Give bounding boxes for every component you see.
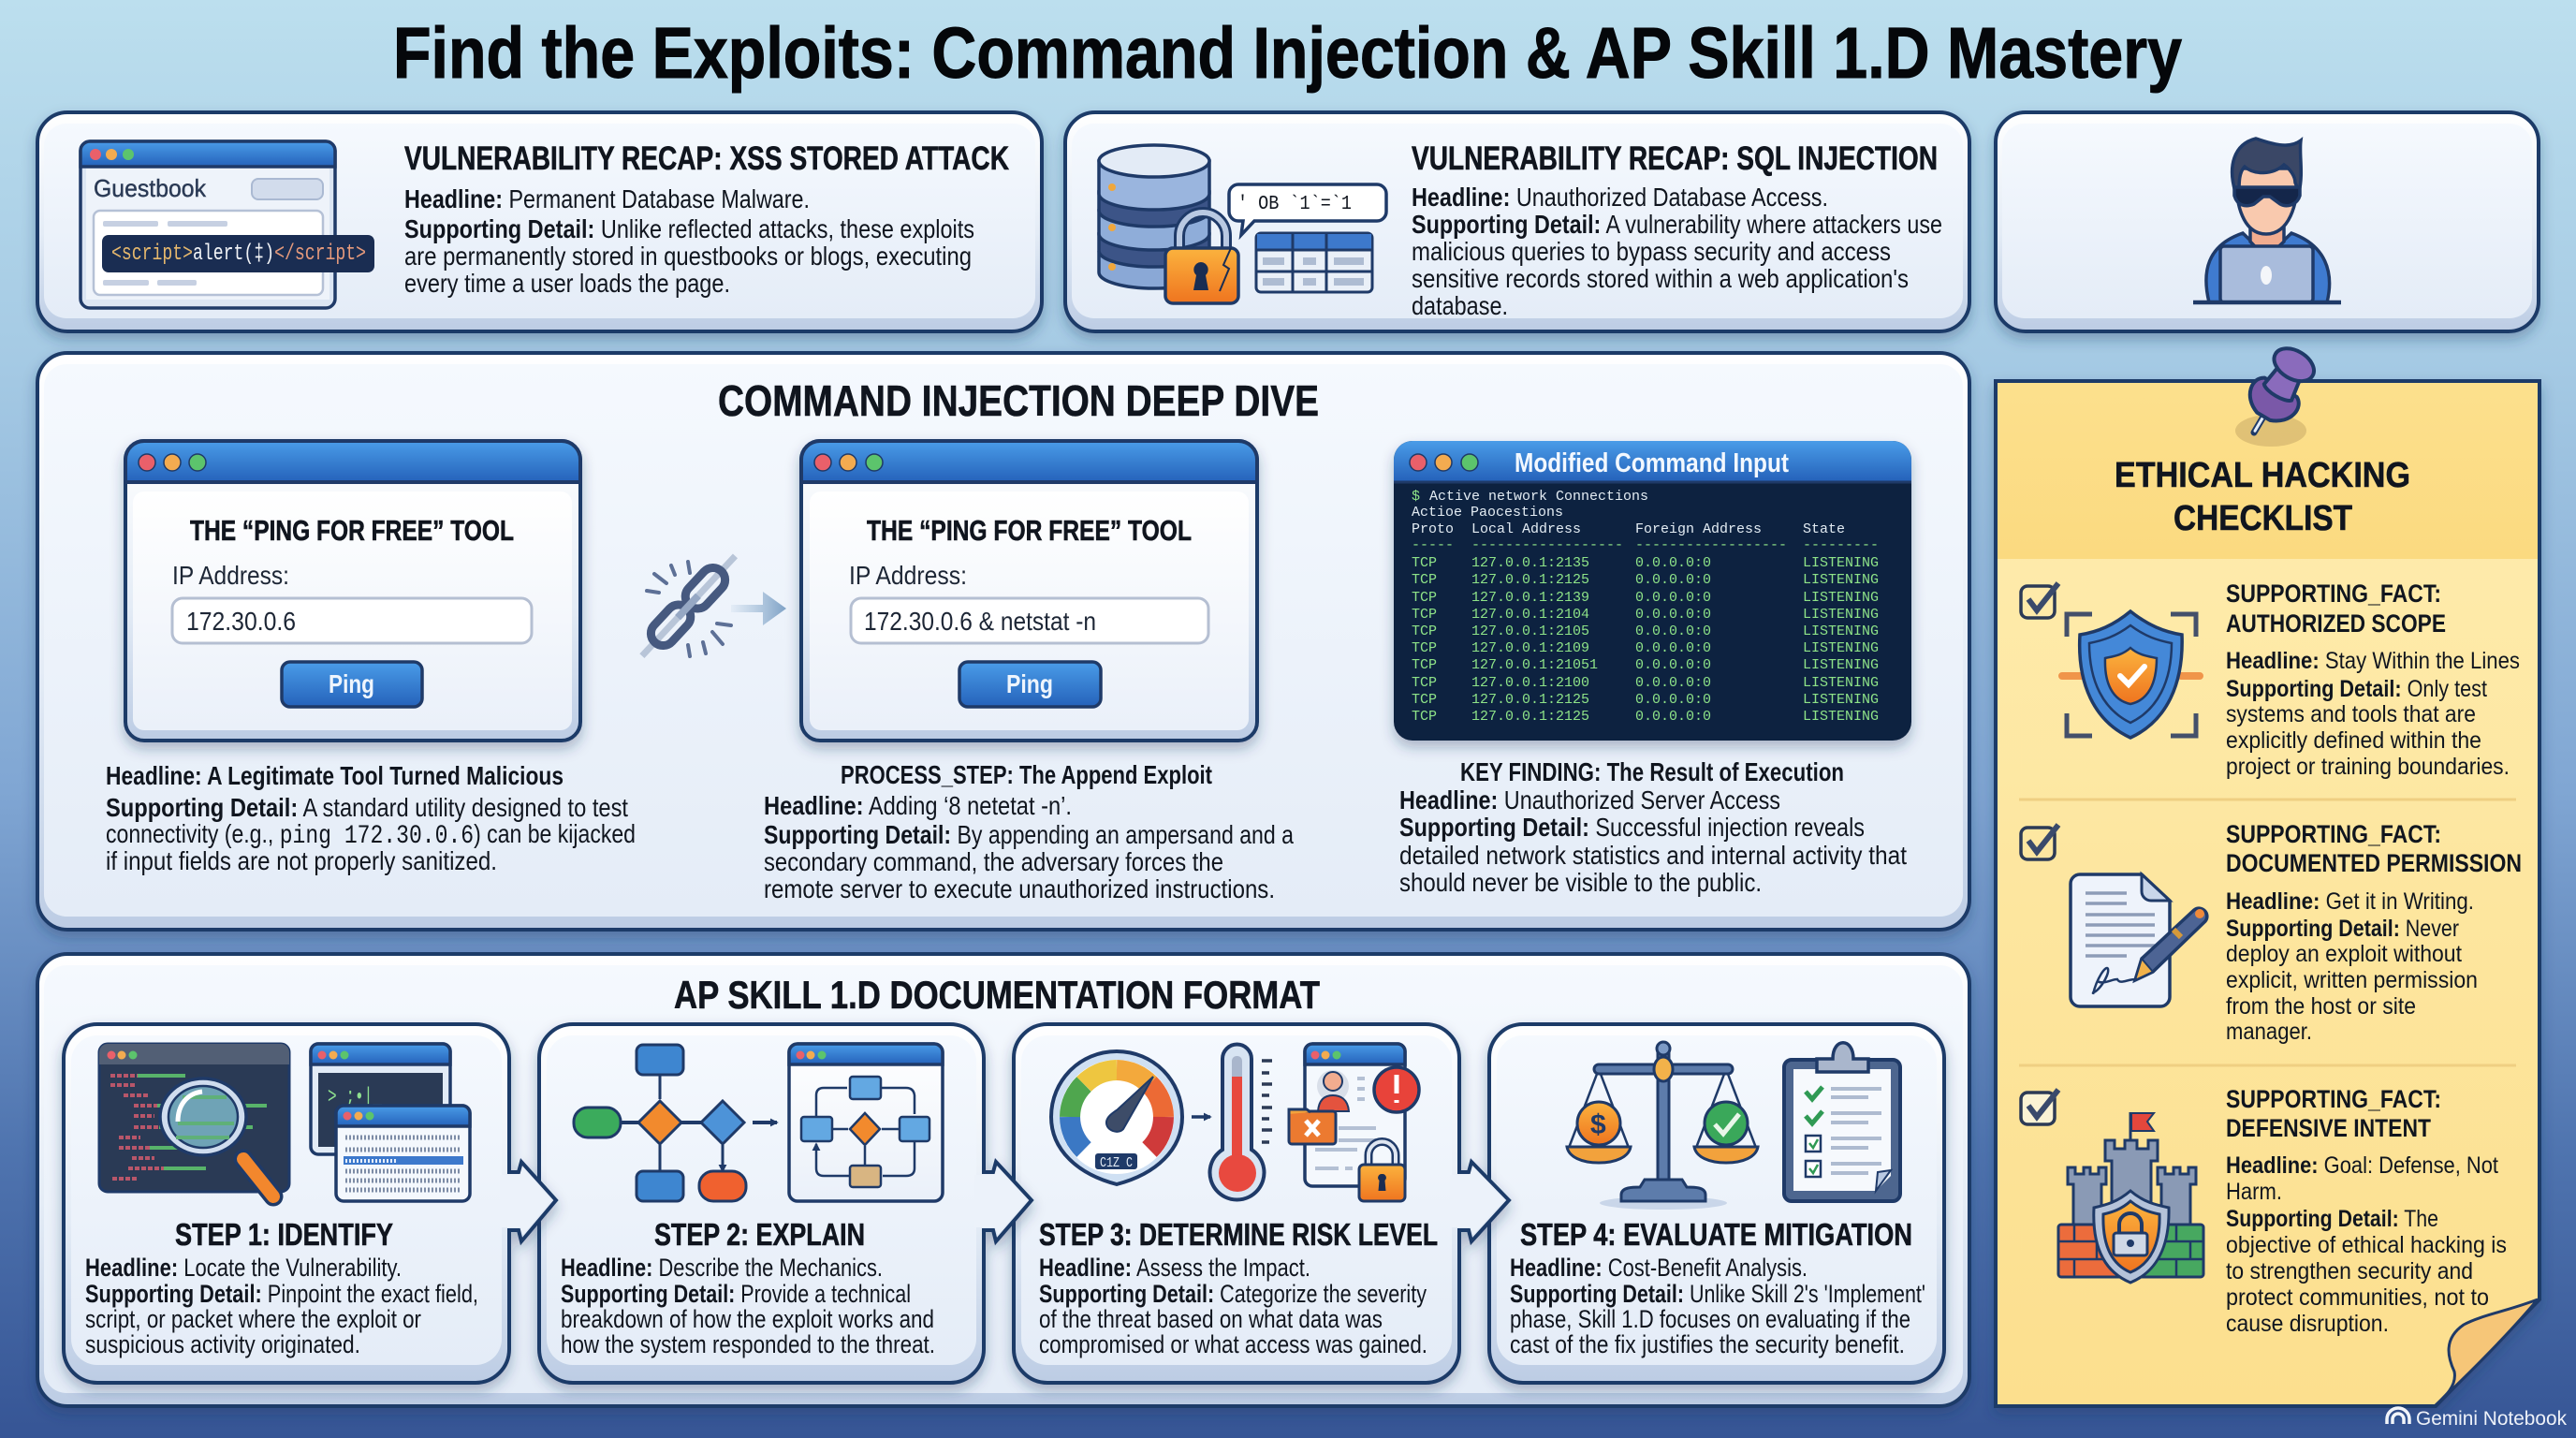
- title: Find the Exploits: Command Injection & AP Skill 1.D Mastery: [393, 13, 2182, 94]
- window: ping tool, exploited: [801, 441, 1257, 741]
- text block: key finding: [1399, 757, 1907, 897]
- text block: step 3: Headline: Assess the Impact.: [1039, 1254, 1310, 1282]
- terminal text: LISTENING: [1803, 709, 1879, 725]
- icon: corner curl: [2436, 1299, 2538, 1405]
- terminal text: LISTENING: [1803, 692, 1879, 708]
- icon: risk gauge: C1Z C: [1100, 1155, 1133, 1171]
- text block: step 4: cast of the fix justifies the security benefit.: [1510, 1330, 1905, 1358]
- icon: guestbook window: <script>alert(‡)</script>: [111, 242, 366, 267]
- terminal text: Proto: [1412, 521, 1454, 537]
- terminal text: 127.0.0.1:2125: [1471, 572, 1589, 588]
- text block: documented permission: SUPPORTING_FACT:: [2226, 820, 2441, 848]
- heading: step 3: STEP 3: DETERMINE RISK LEVEL: [1039, 1217, 1438, 1252]
- step 2: explain: [539, 1024, 1032, 1383]
- text block: legitimate tool: if input fields are not properly sanitized.: [106, 846, 497, 875]
- window: ping tool, legitimate: [125, 441, 580, 741]
- window: ping tool, exploited: 172.30.0.6 & netstat -n: [864, 607, 1096, 636]
- heading: checklist: ETHICAL HACKING: [2115, 456, 2410, 495]
- heading: XSS: VULNERABILITY RECAP: XSS STORED ATTACK: [404, 140, 1009, 177]
- terminal text: 0.0.0.0:0: [1635, 675, 1711, 691]
- terminal text: [1412, 489, 1879, 725]
- text block: SQL: malicious queries to bypass security and access: [1412, 237, 1891, 266]
- icon: balance scale: $: [1590, 1109, 1606, 1140]
- terminal text: 127.0.0.1:2125: [1471, 709, 1589, 725]
- text block: SQL: Headline: Unauthorized Database Access.: [1412, 183, 1828, 212]
- text block: step 2: [561, 1254, 935, 1358]
- text block: legitimate tool: Supporting Detail: A standard utility designed to test: [106, 793, 628, 822]
- text block: step 4: [1510, 1254, 1925, 1358]
- heading: SQL: VULNERABILITY RECAP: SQL INJECTION: [1412, 140, 1938, 177]
- terminal text: Active network Connections: [1429, 489, 1648, 505]
- text block: append exploit: Headline: Adding ‘8 netetat -n’.: [764, 791, 1072, 820]
- window: ping tool, legitimate: THE “PING FOR FREE” TOOL: [190, 514, 514, 547]
- text block: documented permission: Headline: Get it in Writing.: [2226, 888, 2474, 915]
- terminal text: 127.0.0.1:2100: [1471, 675, 1589, 691]
- terminal text: 0.0.0.0:0: [1635, 709, 1711, 725]
- text block: step 1: [85, 1254, 478, 1358]
- terminal text: LISTENING: [1803, 657, 1879, 673]
- terminal text: $: [1412, 489, 1420, 505]
- terminal text: TCP: [1412, 640, 1437, 656]
- text block: defensive intent: SUPPORTING_FACT:: [2226, 1085, 2441, 1113]
- terminal text: -----: [1412, 537, 1454, 553]
- text block: defensive intent: objective of ethical hacking is: [2226, 1232, 2507, 1258]
- terminal text: 0.0.0.0:0: [1635, 624, 1711, 639]
- text block: step 3: of the threat based on what data was: [1039, 1305, 1383, 1333]
- terminal text: 0.0.0.0:0: [1635, 572, 1711, 588]
- panel: hacker illustration: [1996, 112, 2539, 331]
- terminal text: 0.0.0.0:0: [1635, 692, 1711, 708]
- text block: XSS: [404, 184, 974, 298]
- text block: step 2: Headline: Describe the Mechanics.: [561, 1254, 883, 1282]
- step 4: evaluate mitigation: [1489, 1024, 1944, 1383]
- text block: step 2: breakdown of how the exploit works and: [561, 1305, 934, 1333]
- text block: step 3: Supporting Detail: Categorize the severity: [1039, 1280, 1427, 1308]
- text block: authorized scope: Supporting Detail: Only test: [2226, 676, 2487, 702]
- terminal text: LISTENING: [1803, 675, 1879, 691]
- terminal text: TCP: [1412, 590, 1437, 606]
- panel: SQL injection recap: [1065, 112, 1969, 331]
- text block: step 3: compromised or what access was gained.: [1039, 1330, 1427, 1358]
- icon: pushpin: [2232, 340, 2323, 447]
- text block: authorized scope: explicitly defined within the: [2226, 727, 2481, 754]
- text block: append exploit: remote server to execute unauthorized instructions.: [764, 874, 1275, 903]
- heading: deep dive: COMMAND INJECTION DEEP DIVE: [718, 376, 1319, 425]
- terminal text: ---------: [1803, 537, 1879, 553]
- text block: step 1: script, or packet where the exploit or: [85, 1305, 421, 1333]
- terminal text: State: [1803, 521, 1845, 537]
- terminal text: 0.0.0.0:0: [1635, 640, 1711, 656]
- terminal text: 127.0.0.1:2139: [1471, 590, 1589, 606]
- text block: step 2: how the system responded to the threat.: [561, 1330, 935, 1358]
- icon: checkbox: [2021, 1090, 2058, 1124]
- terminal text: LISTENING: [1803, 572, 1879, 588]
- heading: step 4: STEP 4: EVALUATE MITIGATION: [1520, 1217, 1912, 1252]
- text block: append exploit: PROCESS_STEP: The Append Exploit: [841, 760, 1212, 789]
- panel: AP skill 1.D documentation format: [37, 954, 1969, 1406]
- item: documented permission: [2021, 820, 2522, 1045]
- icon: shield in brackets: [2062, 611, 2200, 738]
- text block: authorized scope: systems and tools that are: [2226, 701, 2476, 727]
- text block: step 4: Headline: Cost-Benefit Analysis.: [1510, 1254, 1808, 1282]
- heading: step 2: STEP 2: EXPLAIN: [654, 1217, 865, 1252]
- window: ping tool, exploited: THE “PING FOR FREE” TOOL: [867, 514, 1192, 547]
- text block: authorized scope: AUTHORIZED SCOPE: [2226, 609, 2446, 638]
- terminal text: TCP: [1412, 692, 1437, 708]
- text block: append exploit: [764, 760, 1294, 903]
- text block: XSS: Supporting Detail: Unlike reflected attacks, these exploits: [404, 214, 974, 243]
- icon: checkbox: [2021, 583, 2058, 618]
- icon: signed document and pen: [2071, 874, 2207, 1006]
- terminal text: LISTENING: [1803, 640, 1879, 656]
- window: terminal output: [1394, 441, 1911, 741]
- terminal text: TCP: [1412, 709, 1437, 725]
- terminal text: 127.0.0.1:2125: [1471, 692, 1589, 708]
- terminal text: Actioe Paocestions: [1412, 505, 1563, 521]
- terminal text: 0.0.0.0:0: [1635, 657, 1711, 673]
- text block: documented permission: [2226, 820, 2522, 1045]
- text block: defensive intent: cause disruption.: [2226, 1311, 2389, 1337]
- watermark: Gemini Notebook: Gemini Notebook: [2416, 1408, 2567, 1430]
- text block: SQL: database.: [1412, 291, 1508, 320]
- panel: command injection deep dive: [37, 353, 1969, 930]
- icon: clipboard checklist: [1784, 1043, 1900, 1201]
- window: terminal output: Modified Command Input: [1515, 448, 1789, 478]
- text block: key finding: Headline: Unauthorized Server Access: [1399, 785, 1780, 814]
- text block: defensive intent: Supporting Detail: The: [2226, 1206, 2438, 1232]
- heading: checklist: CHECKLIST: [2174, 499, 2352, 538]
- text block: key finding: KEY FINDING: The Result of Execution: [1460, 757, 1844, 786]
- step 1: identify: [64, 1024, 556, 1383]
- text block: SQL: sensitive records stored within a web application's: [1412, 264, 1909, 293]
- heading: step 1: STEP 1: IDENTIFY: [175, 1217, 393, 1252]
- terminal text: TCP: [1412, 657, 1437, 673]
- item: defensive intent: [2021, 1085, 2507, 1337]
- icon: code terminal: [99, 1044, 289, 1192]
- arrow: gauge to thermometer: [1192, 1115, 1210, 1119]
- text block: append exploit: secondary command, the adversary forces the: [764, 847, 1223, 876]
- terminal text: 127.0.0.1:2104: [1471, 607, 1589, 623]
- terminal text: TCP: [1412, 572, 1437, 588]
- text block: SQL: [1412, 183, 1942, 320]
- icon: balance scale: [1567, 1042, 1758, 1210]
- terminal text: TCP: [1412, 555, 1437, 571]
- icon: data table: [1256, 233, 1372, 292]
- terminal text: 127.0.0.1:2135: [1471, 555, 1589, 571]
- text block: key finding: should never be visible to the public.: [1399, 868, 1762, 897]
- text block: step 2: Supporting Detail: Provide a technical: [561, 1280, 911, 1308]
- text block: authorized scope: project or training boundaries.: [2226, 754, 2510, 780]
- icon: checkbox: [2021, 825, 2058, 859]
- terminal text: LISTENING: [1803, 607, 1879, 623]
- text block: step 1: suspicious activity originated.: [85, 1330, 360, 1358]
- terminal text: TCP: [1412, 607, 1437, 623]
- item: authorized scope: [2021, 580, 2520, 780]
- terminal text: ------------------: [1471, 537, 1623, 553]
- terminal text: ------------------: [1635, 537, 1787, 553]
- terminal text: 0.0.0.0:0: [1635, 590, 1711, 606]
- text block: step 4: Supporting Detail: Unlike Skill 2's 'Implement': [1510, 1280, 1925, 1308]
- text block: step 4: phase, Skill 1.D focuses on evaluating if the: [1510, 1305, 1910, 1333]
- panel: ethical hacking checklist note: [1996, 340, 2539, 1406]
- icon: data table window: [336, 1106, 470, 1201]
- step 3: determine risk level: [1014, 1024, 1509, 1383]
- text block: defensive intent: to strengthen security and: [2226, 1258, 2473, 1284]
- icon: thermometer: [1209, 1045, 1272, 1200]
- text block: legitimate tool: connectivity (e.g., ping 172.30.0.6) can be kijacked: [106, 819, 636, 851]
- terminal text: Foreign Address: [1635, 521, 1762, 537]
- window: ping tool, legitimate: Ping: [329, 669, 374, 698]
- text block: defensive intent: protect communities, not to: [2226, 1284, 2489, 1311]
- text block: step 1: Supporting Detail: Pinpoint the exact field,: [85, 1280, 478, 1308]
- icon: shell window: > ;•|_: [328, 1085, 382, 1110]
- text block: legitimate tool: Headline: A Legitimate Tool Turned Malicious: [106, 761, 564, 790]
- terminal text: TCP: [1412, 624, 1437, 639]
- window: ping tool, exploited: IP Address:: [849, 561, 967, 590]
- terminal text: LISTENING: [1803, 555, 1879, 571]
- icon: broken chain: [633, 548, 744, 665]
- text block: XSS: every time a user loads the page.: [404, 269, 730, 298]
- text block: XSS: Headline: Permanent Database Malware.: [404, 184, 810, 213]
- text block: documented permission: manager.: [2226, 1019, 2312, 1045]
- text block: append exploit: Supporting Detail: By appending an ampersand and a: [764, 820, 1294, 849]
- icon: magnifying glass: [160, 1078, 273, 1196]
- text block: SQL: Supporting Detail: A vulnerability where attackers use: [1412, 210, 1942, 239]
- text block: authorized scope: Headline: Stay Within the Lines: [2226, 648, 2520, 674]
- window: ping tool, legitimate: 172.30.0.6: [186, 607, 296, 636]
- terminal text: 0.0.0.0:0: [1635, 607, 1711, 623]
- icon: guestbook window: Guestbook: [94, 174, 207, 202]
- text block: legitimate tool: [106, 761, 636, 875]
- text block: documented permission: explicit, written permission: [2226, 967, 2478, 993]
- text block: key finding: Supporting Detail: Successful injection reveals: [1399, 813, 1865, 842]
- icon: flowchart: [574, 1045, 777, 1201]
- text block: step 1: Headline: Locate the Vulnerability.: [85, 1254, 402, 1282]
- window: ping tool, exploited: Ping: [1006, 669, 1053, 698]
- icon: risk gauge: [1051, 1051, 1182, 1184]
- panel: XSS stored attack recap: [37, 112, 1042, 331]
- terminal text: 0.0.0.0:0: [1635, 555, 1711, 571]
- text block: documented permission: DOCUMENTED PERMISSION: [2226, 849, 2522, 877]
- icon: guestbook window: [80, 141, 374, 308]
- terminal text: Local Address: [1471, 521, 1581, 537]
- text block: documented permission: deploy an exploit without: [2226, 941, 2462, 967]
- icon: process window: [789, 1044, 943, 1201]
- terminal text: 127.0.0.1:21051: [1471, 657, 1598, 673]
- icon: speech bubble with query: [1229, 184, 1386, 235]
- heading: checklist: [2115, 456, 2410, 538]
- text block: documented permission: Supporting Detail: Never: [2226, 916, 2459, 942]
- text block: authorized scope: [2226, 580, 2520, 780]
- text block: step 3: [1039, 1254, 1427, 1358]
- heading: documentation format: AP SKILL 1.D DOCUMENTATION FORMAT: [674, 973, 1320, 1017]
- icon: hacker at laptop: [2193, 139, 2341, 302]
- terminal text: 127.0.0.1:2109: [1471, 640, 1589, 656]
- text block: XSS: are permanently stored in questbooks or blogs, executing: [404, 242, 972, 271]
- terminal text: 127.0.0.1:2105: [1471, 624, 1589, 639]
- arrow: to exploit window: [731, 592, 786, 625]
- terminal text: LISTENING: [1803, 590, 1879, 606]
- icon: shell window: [311, 1044, 450, 1154]
- text block: defensive intent: [2226, 1085, 2507, 1337]
- window: ping tool, legitimate: IP Address:: [172, 561, 289, 590]
- icon: speech bubble with query: ' OB `1`=`1: [1237, 194, 1352, 215]
- text block: key finding: detailed network statistics and internal activity that: [1399, 841, 1907, 870]
- icon: compromised record window: [1289, 1044, 1419, 1201]
- icon: castle with shield: [2058, 1112, 2203, 1283]
- text block: defensive intent: Headline: Goal: Defense, Not: [2226, 1152, 2498, 1179]
- text block: documented permission: from the host or site: [2226, 993, 2416, 1020]
- terminal text: TCP: [1412, 675, 1437, 691]
- terminal text: LISTENING: [1803, 624, 1879, 639]
- text block: authorized scope: SUPPORTING_FACT:: [2226, 580, 2441, 608]
- icon: database with lock: [1099, 145, 1238, 303]
- text block: defensive intent: Harm.: [2226, 1179, 2282, 1205]
- text block: defensive intent: DEFENSIVE INTENT: [2226, 1114, 2431, 1142]
